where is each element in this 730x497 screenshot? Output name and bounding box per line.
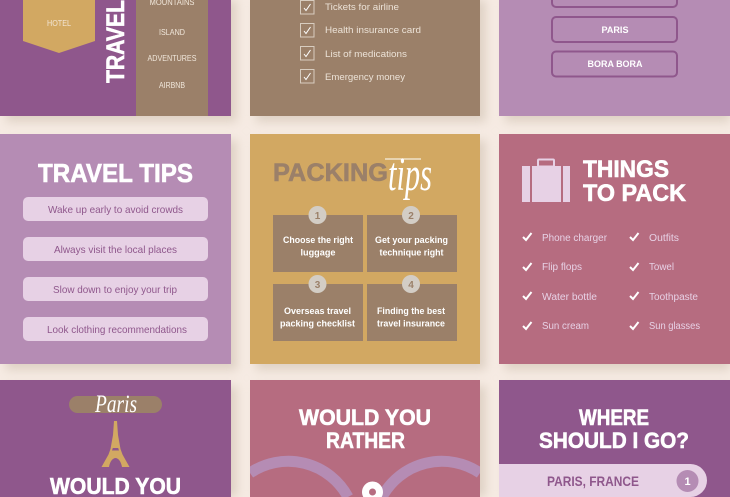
tip card 2: Get your packing <box>375 235 448 245</box>
tip 2: Always visit the local places <box>54 244 177 256</box>
destination list column <box>136 0 208 116</box>
decorative arcs <box>250 461 480 497</box>
packing list right column: Outfits <box>649 233 679 244</box>
icon: location pin <box>362 482 383 497</box>
tip card 4 <box>367 275 457 341</box>
icon: Eiffel tower <box>102 421 130 467</box>
tip 2 <box>23 237 208 261</box>
tip card 4: 4 <box>408 280 414 291</box>
tip card 2: technique right <box>380 248 444 258</box>
heading <box>583 156 687 207</box>
packing list left column: Flip flops <box>542 262 582 273</box>
panel: packing tips <box>250 134 480 364</box>
script label: Paris: Paris <box>94 391 137 418</box>
packing list right column: Towel <box>649 262 674 273</box>
checklist item: medications: List of medications <box>325 49 407 60</box>
heading <box>299 405 431 453</box>
icon: suitcase <box>522 160 570 202</box>
tip card 3: 3 <box>315 280 321 291</box>
heading: TO PACK <box>583 180 687 207</box>
hotel ribbon <box>23 0 95 53</box>
packing list left column: Sun cream <box>542 321 589 332</box>
option row: Paris, France: 1 <box>684 476 691 488</box>
panel: Paris would you <box>0 380 231 497</box>
tip 3 <box>23 277 208 301</box>
checklist item: money <box>300 70 405 83</box>
packing list left column: Phone charger <box>542 233 608 244</box>
hotel ribbon: HOTEL <box>47 18 71 28</box>
heading: RATHER <box>326 428 405 453</box>
tip card 1: Choose the right <box>283 235 353 245</box>
tip card 1: luggage <box>300 248 336 258</box>
packing list right column: Toothpaste <box>649 292 698 303</box>
checklist item: medications <box>300 46 407 60</box>
panel: would you rather <box>250 380 480 497</box>
tip card 2: 2 <box>408 211 414 222</box>
tip card 4: Finding the best <box>377 306 445 316</box>
panel: travel destinations <box>0 0 231 116</box>
tip 4 <box>23 317 208 341</box>
heading: TRAVEL TIPS <box>38 158 193 188</box>
option row: Paris, France: PARIS, FRANCE <box>547 473 639 489</box>
button: Bora Bora <box>552 52 677 76</box>
option row: Paris, France <box>499 464 707 497</box>
heading: SHOULD I GO? <box>539 428 689 453</box>
packing list right column: Sun glasses <box>649 321 700 332</box>
heading: THINGS <box>583 156 669 183</box>
tip card 1 <box>273 206 363 272</box>
heading <box>539 405 689 453</box>
destination list column: AIRBNB <box>159 81 185 90</box>
button: Bora Bora: BORA BORA <box>588 59 643 70</box>
heading: packing: PACKING <box>273 159 388 187</box>
tip 1: Wake up early to avoid crowds <box>48 204 183 216</box>
heading: tips script: tips <box>388 148 432 201</box>
tip card 1: 1 <box>315 211 321 222</box>
tip card 3 <box>273 275 363 341</box>
heading: WOULD YOU <box>299 405 431 430</box>
pill label <box>69 396 162 413</box>
checklist item: insurance <box>300 24 421 37</box>
checklist item: tickets: Tickets for airline <box>325 2 399 13</box>
tip 1 <box>23 197 208 221</box>
button: Paris <box>552 17 677 42</box>
button: Paris: PARIS <box>602 25 628 36</box>
checklist item: insurance: Health insurance card <box>325 25 421 36</box>
checklist item: money: Emergency money <box>325 72 405 83</box>
tip card 3: packing checklist <box>280 318 355 328</box>
panel: things to pack <box>499 134 730 364</box>
destination list column: ADVENTURES <box>148 54 196 63</box>
tip 3: Slow down to enjoy your trip <box>53 284 177 296</box>
tip card 4: travel insurance <box>377 318 445 328</box>
packing list left column <box>523 233 608 332</box>
heading: WHERE <box>579 405 649 430</box>
checklist item: tickets <box>300 0 399 14</box>
panel: where should I go <box>499 380 730 497</box>
packing list right column <box>630 233 700 332</box>
panel: travel tips <box>0 134 231 364</box>
panel: checklist <box>250 0 480 116</box>
tip 4: Look clothing recommendations <box>47 324 187 336</box>
tip card 3: Overseas travel <box>284 306 351 316</box>
tip card 2 <box>367 206 457 272</box>
packing list left column: Water bottle <box>542 292 597 303</box>
panel: destinations buttons <box>499 0 730 116</box>
button: top <box>552 0 677 7</box>
destination list column: ISLAND <box>159 28 185 37</box>
